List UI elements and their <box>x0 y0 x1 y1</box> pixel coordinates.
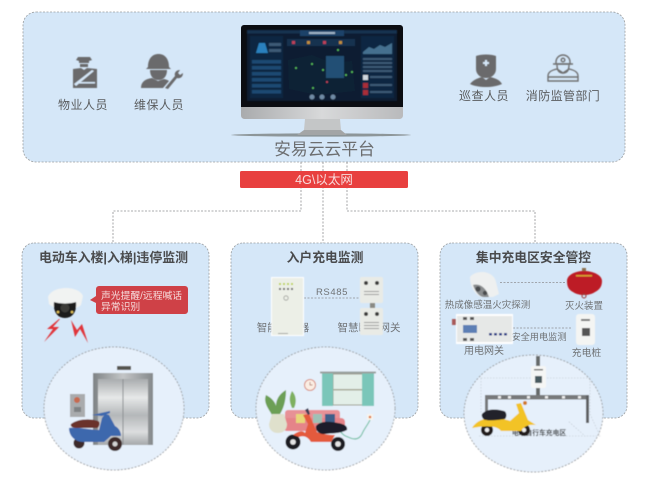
icon: patrol staff <box>470 54 502 87</box>
label: charging area: 电动自行车充电区 <box>512 428 566 437</box>
icon: lightning alarms <box>44 319 88 343</box>
callout: alarm: 异常识别 <box>101 300 140 313</box>
charging rack <box>485 356 589 423</box>
title: platform name: 安易云云平台 <box>274 140 375 159</box>
elevator call panel <box>70 394 85 417</box>
elevator sign <box>117 366 131 370</box>
monitor screen dashboard <box>247 30 397 101</box>
connector: RS485 link <box>304 297 360 299</box>
icon: yellow scooter <box>472 401 536 436</box>
label: right device: 智慧断路网关 <box>338 321 401 334</box>
scene: charging station <box>464 355 603 472</box>
label: power gateway: 用电网关 <box>464 344 504 357</box>
connector: gateway to pile <box>513 327 572 329</box>
device: collector <box>271 277 304 336</box>
label: RS485: RS485 <box>316 287 348 298</box>
socket and cable <box>340 414 373 439</box>
sofa <box>283 410 345 431</box>
heading: 入户充电监测 <box>287 250 364 265</box>
icon: dome camera <box>48 288 83 318</box>
icon: blue scooter <box>69 411 122 451</box>
connector: camera to extinguisher <box>500 282 565 284</box>
callout: alarm <box>90 286 188 314</box>
label: fire department: 消防监管部门 <box>526 88 600 103</box>
label: thermal detection: 热成像感温火灾探测 <box>445 299 530 311</box>
device: power gateway <box>452 314 513 344</box>
icon: property staff <box>73 57 97 88</box>
connector: network lines <box>113 162 535 243</box>
network bar <box>240 171 408 188</box>
label: extinguisher: 灭火装置 <box>565 300 603 312</box>
panel: home charging monitoring <box>231 243 418 418</box>
scene: elevator and scooter <box>44 347 184 470</box>
wall clock <box>304 380 316 390</box>
floor outline <box>479 378 600 436</box>
scene: home charging <box>256 347 395 470</box>
icon: thermal camera <box>470 272 499 297</box>
network bar: 4G\以太网 <box>295 172 353 187</box>
charger unit <box>531 366 546 388</box>
label: patrol staff: 巡查人员 <box>459 89 509 103</box>
label: maintenance staff: 维保人员 <box>134 98 184 112</box>
panel: platform <box>23 12 625 162</box>
icon: fire department <box>548 55 578 81</box>
device: gateway modules <box>360 277 383 335</box>
label: safety monitoring: 安全用电监测 <box>511 331 567 342</box>
heading: 电动车入楼|入梯|违停监测 <box>39 250 188 265</box>
icon: red scooter charging <box>286 408 347 451</box>
device: charging pile <box>576 314 595 345</box>
callout: alarm: 声光提醒/远程喊话 <box>101 289 182 302</box>
icon: maintenance staff <box>141 54 183 89</box>
label: property staff: 物业人员 <box>58 98 108 112</box>
icon: monitor <box>231 25 411 137</box>
heading: 集中充电区安全管控 <box>476 250 591 265</box>
window with curtains <box>320 372 376 406</box>
panel: centralized charging area <box>440 243 627 418</box>
potted plant <box>265 390 296 433</box>
panel: e-bike entry monitoring <box>22 243 209 418</box>
elevator doors <box>93 373 153 445</box>
icon: fire extinguisher <box>567 268 602 298</box>
label: charging pile: 充电桩 <box>572 346 601 359</box>
label: left device: 智能断路器 <box>257 321 310 334</box>
